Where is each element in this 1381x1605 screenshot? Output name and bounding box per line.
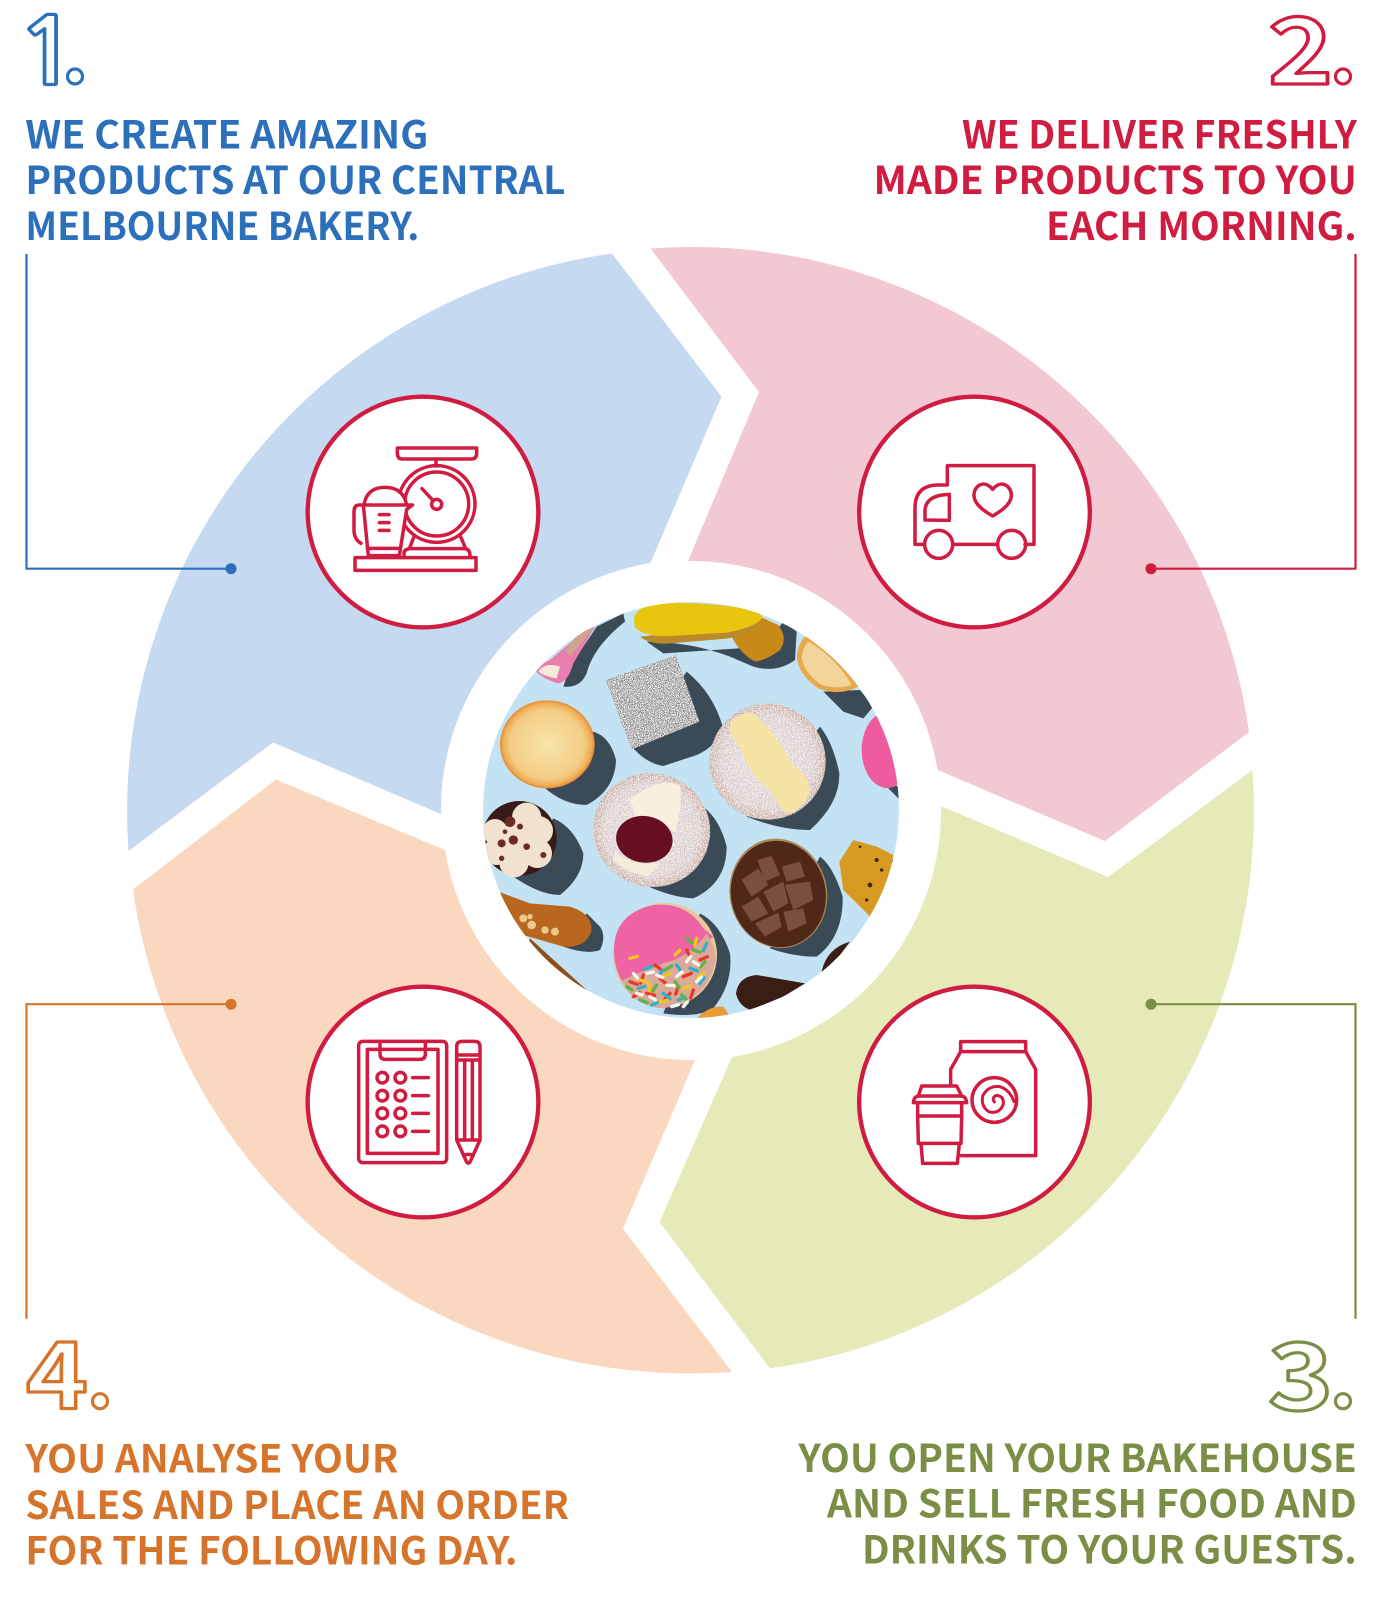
- yellow eclair: [731, 617, 784, 662]
- icon: scales and jug: [308, 397, 538, 627]
- shadows: [513, 613, 900, 1015]
- sugar donut right: [710, 703, 826, 820]
- heading: step 4: SALES AND PLACE AN ORDER: [25, 1475, 569, 1531]
- cannoli: [536, 627, 595, 683]
- panel: step 1 segment (blue arrow): [127, 254, 721, 851]
- photo: assorted pastries: [482, 602, 913, 1020]
- heading: step 1: MELBOURNE BAKERY.: [25, 196, 419, 252]
- sprinkles: [627, 938, 707, 1007]
- connector: step 3: [1146, 999, 1356, 1319]
- heading: step 4: YOU ANALYSE YOUR: [24, 1429, 398, 1485]
- small pastry bottom: [697, 1006, 729, 1018]
- number 1: 1: [15, 7, 81, 98]
- chocolate brownie donut: [729, 838, 828, 948]
- panel: step 4 segment (peach arrow): [133, 780, 732, 1374]
- heading: step 3: YOU OPEN YOUR BAKEHOUSE: [797, 1428, 1357, 1484]
- heading: step 1: WE CREATE AMAZING: [25, 104, 428, 160]
- small pie top right: [797, 635, 858, 692]
- chocolate cupcake: [482, 801, 557, 876]
- heading: step 3: DRINKS TO YOUR GUESTS.: [862, 1520, 1357, 1576]
- jam donut centre: [593, 772, 710, 888]
- heading: step 2: [874, 104, 1357, 252]
- number 4: 4: [26, 1303, 88, 1436]
- heading: step 1: [25, 104, 565, 252]
- dark eclair bottom: [736, 975, 805, 1010]
- central white ring: [442, 562, 940, 1060]
- icon: coffee cup and bag: [859, 987, 1090, 1217]
- icon: clipboard and pencil: [308, 987, 538, 1217]
- icon: delivery truck with heart: [859, 397, 1090, 627]
- heading: step 2: MADE PRODUCTS TO YOU: [874, 150, 1357, 206]
- panel: step 2 segment (pink arrow): [650, 247, 1249, 841]
- orange pastry right: [839, 840, 893, 917]
- heading: step 2: EACH MORNING.: [1046, 196, 1357, 252]
- caramel eclair bottom left: [527, 938, 587, 990]
- pink sprinkle donut: [613, 903, 717, 1007]
- connector: step 2: [1146, 254, 1356, 574]
- large pie: [500, 700, 595, 788]
- connector: step 1: [26, 254, 236, 574]
- heading: step 1: PRODUCTS AT OUR CENTRAL: [25, 150, 565, 206]
- pink glazed right: [862, 716, 898, 788]
- heading: step 3: [797, 1428, 1357, 1576]
- heading: step 2: WE DELIVER FRESHLY: [962, 104, 1357, 160]
- number 3: 3: [1268, 1304, 1333, 1437]
- connector: step 4: [26, 999, 236, 1319]
- heading: step 4: FOR THE FOLLOWING DAY.: [25, 1520, 517, 1576]
- lamington: [606, 655, 699, 749]
- panel: step 3 segment (green arrow): [660, 770, 1254, 1368]
- heading: step 4: [24, 1429, 569, 1576]
- heading: step 3: AND SELL FRESH FOOD AND: [826, 1474, 1357, 1530]
